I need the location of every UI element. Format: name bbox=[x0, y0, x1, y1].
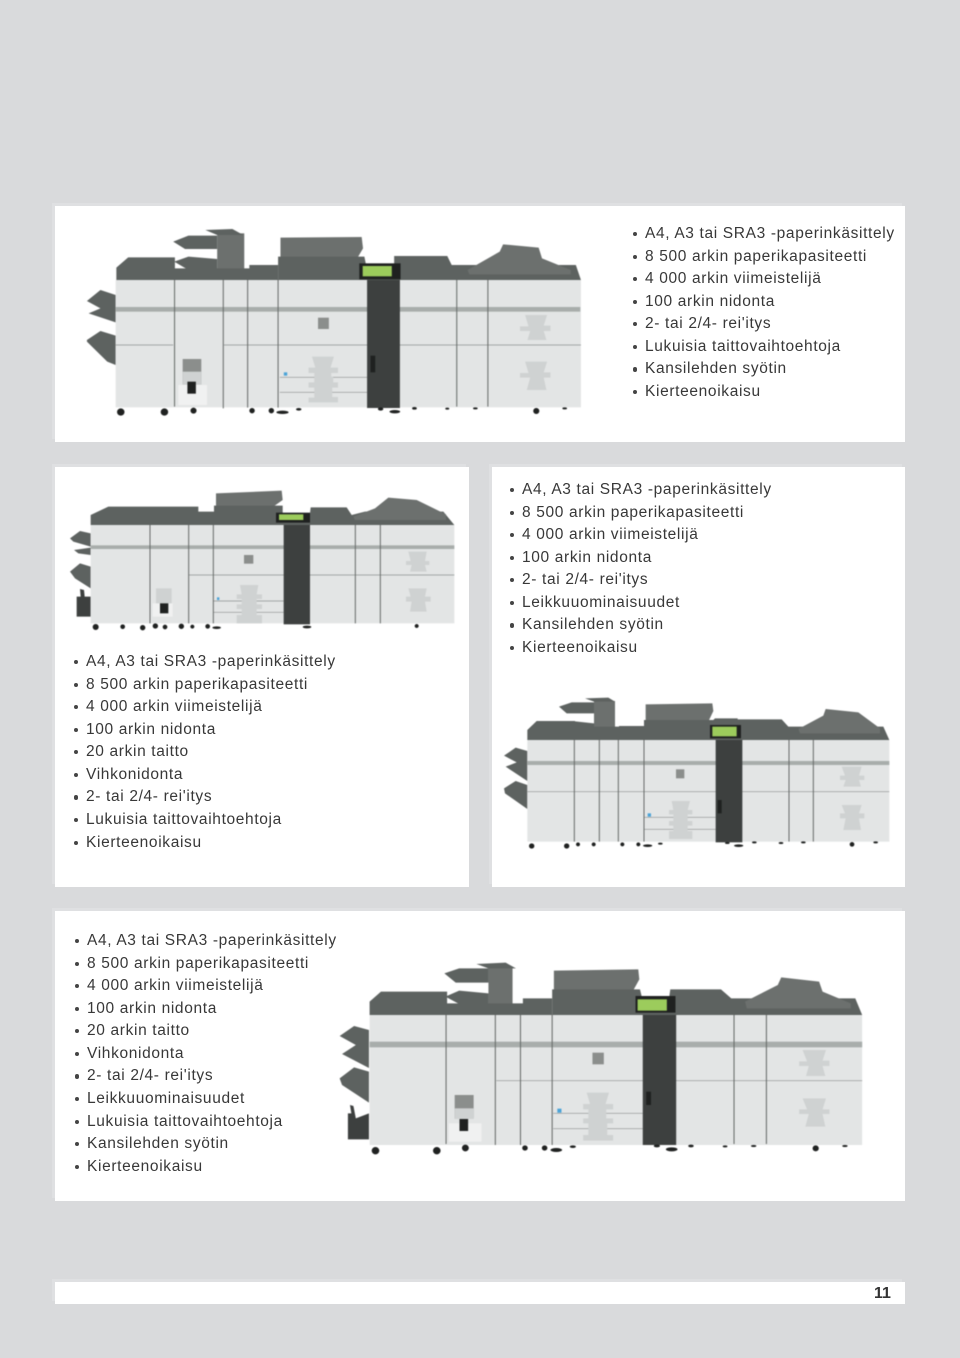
text: middle right feature list: A4, A3 tai SRA3 -paperinkäsittely bbox=[522, 481, 772, 498]
text: middle right feature list: Kansilehden syötin bbox=[522, 616, 664, 633]
text: middle left feature list: 2- tai 2/4- rei'itys bbox=[86, 788, 212, 805]
text: bottom feature list bbox=[75, 932, 337, 1175]
text: bottom feature list: Vihkonidonta bbox=[87, 1045, 184, 1062]
image: middle right printer bbox=[503, 696, 890, 850]
text: middle left feature list: 100 arkin nidonta bbox=[86, 721, 216, 738]
text: middle right feature list bbox=[510, 481, 772, 656]
text: top feature list: A4, A3 tai SRA3 -paperinkäsittely bbox=[645, 225, 895, 242]
text: top feature list: 2- tai 2/4- rei'itys bbox=[645, 315, 771, 332]
text: middle left feature list bbox=[74, 653, 336, 850]
text: top feature list: Lukuisia taittovaihtoehtoja bbox=[645, 338, 841, 355]
text: bottom feature list: Leikkuuominaisuudet bbox=[87, 1090, 245, 1107]
text: middle left feature list: 20 arkin taitto bbox=[86, 743, 189, 760]
page number: 11 bbox=[874, 1285, 891, 1302]
image: top printer bbox=[86, 228, 582, 416]
text: top feature list: Kansilehden syötin bbox=[645, 360, 787, 377]
text: middle right feature list: Kierteenoikaisu bbox=[522, 639, 638, 656]
text: middle right feature list: Leikkuuominaisuudet bbox=[522, 594, 680, 611]
text: middle left feature list: A4, A3 tai SRA3 -paperinkäsittely bbox=[86, 653, 336, 670]
text: bottom feature list: 8 500 arkin paperikapasiteetti bbox=[87, 955, 309, 972]
text: top feature list: Kierteenoikaisu bbox=[645, 383, 761, 400]
text: middle left feature list: 8 500 arkin paperikapasiteetti bbox=[86, 676, 308, 693]
text: bottom feature list: 2- tai 2/4- rei'itys bbox=[87, 1067, 213, 1084]
text: middle left feature list: 4 000 arkin viimeistelijä bbox=[86, 698, 262, 715]
footer bar bbox=[55, 1282, 905, 1304]
panel: top product bbox=[55, 206, 905, 442]
image: middle left printer bbox=[70, 490, 455, 632]
text: middle left feature list: Vihkonidonta bbox=[86, 766, 183, 783]
panel: bottom product bbox=[55, 911, 905, 1201]
text: top feature list bbox=[633, 225, 895, 400]
image: bottom printer bbox=[339, 962, 863, 1156]
text: bottom feature list: 100 arkin nidonta bbox=[87, 1000, 217, 1017]
panel: middle left product bbox=[55, 467, 469, 887]
text: middle right feature list: 4 000 arkin viimeistelijä bbox=[522, 526, 698, 543]
text: bottom feature list: 20 arkin taitto bbox=[87, 1022, 190, 1039]
text: bottom feature list: 4 000 arkin viimeistelijä bbox=[87, 977, 264, 994]
text: bottom feature list: A4, A3 tai SRA3 -paperinkäsittely bbox=[87, 932, 337, 949]
text: middle left feature list: Kierteenoikaisu bbox=[86, 834, 202, 850]
text: bottom feature list: Kierteenoikaisu bbox=[87, 1158, 203, 1175]
text: middle right feature list: 100 arkin nidonta bbox=[522, 549, 652, 566]
text: middle right feature list: 2- tai 2/4- rei'itys bbox=[522, 571, 648, 588]
text: middle right feature list: 8 500 arkin paperikapasiteetti bbox=[522, 504, 744, 521]
text: top feature list: 4 000 arkin viimeistelijä bbox=[645, 270, 822, 287]
text: top feature list: 100 arkin nidonta bbox=[645, 293, 775, 310]
panel: middle right product bbox=[492, 467, 905, 887]
text: top feature list: 8 500 arkin paperikapasiteetti bbox=[645, 248, 867, 265]
text: bottom feature list: Kansilehden syötin bbox=[87, 1135, 229, 1152]
text: middle left feature list: Lukuisia taittovaihtoehtoja bbox=[86, 811, 282, 828]
text: bottom feature list: Lukuisia taittovaihtoehtoja bbox=[87, 1112, 283, 1130]
